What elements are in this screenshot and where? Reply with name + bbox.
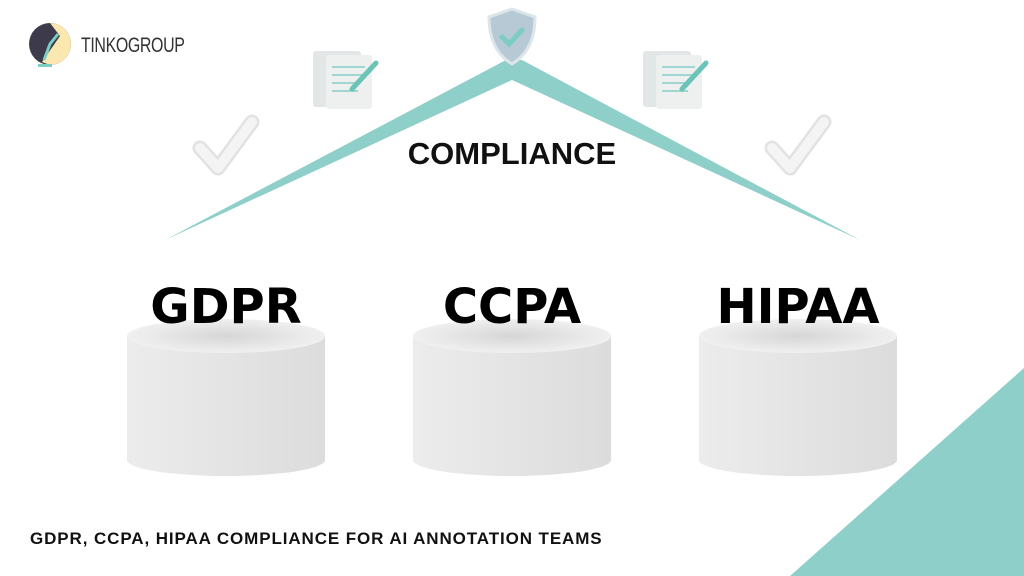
label: HIPAA: HIPAA xyxy=(716,279,880,335)
pillar: GDPR xyxy=(127,319,325,476)
pillar: CCPA xyxy=(413,319,611,476)
label: CCPA: CCPA xyxy=(443,279,581,335)
roof shape xyxy=(166,60,860,240)
brand name: TINKOGROUP xyxy=(81,34,185,57)
icon: document left xyxy=(313,51,378,109)
icon: document right xyxy=(643,51,708,109)
icon: shield xyxy=(488,8,536,66)
icon: lamp logo xyxy=(29,23,71,67)
footer caption: GDPR, CCPA, HIPAA COMPLIANCE FOR AI ANNOTATION TEAMS xyxy=(30,529,603,548)
icon: check right xyxy=(764,114,832,176)
heading: compliance: COMPLIANCE xyxy=(408,136,616,171)
icon: check left xyxy=(192,114,260,176)
label: GDPR: GDPR xyxy=(150,279,302,335)
logo xyxy=(29,23,185,67)
pillar: HIPAA xyxy=(699,319,897,476)
